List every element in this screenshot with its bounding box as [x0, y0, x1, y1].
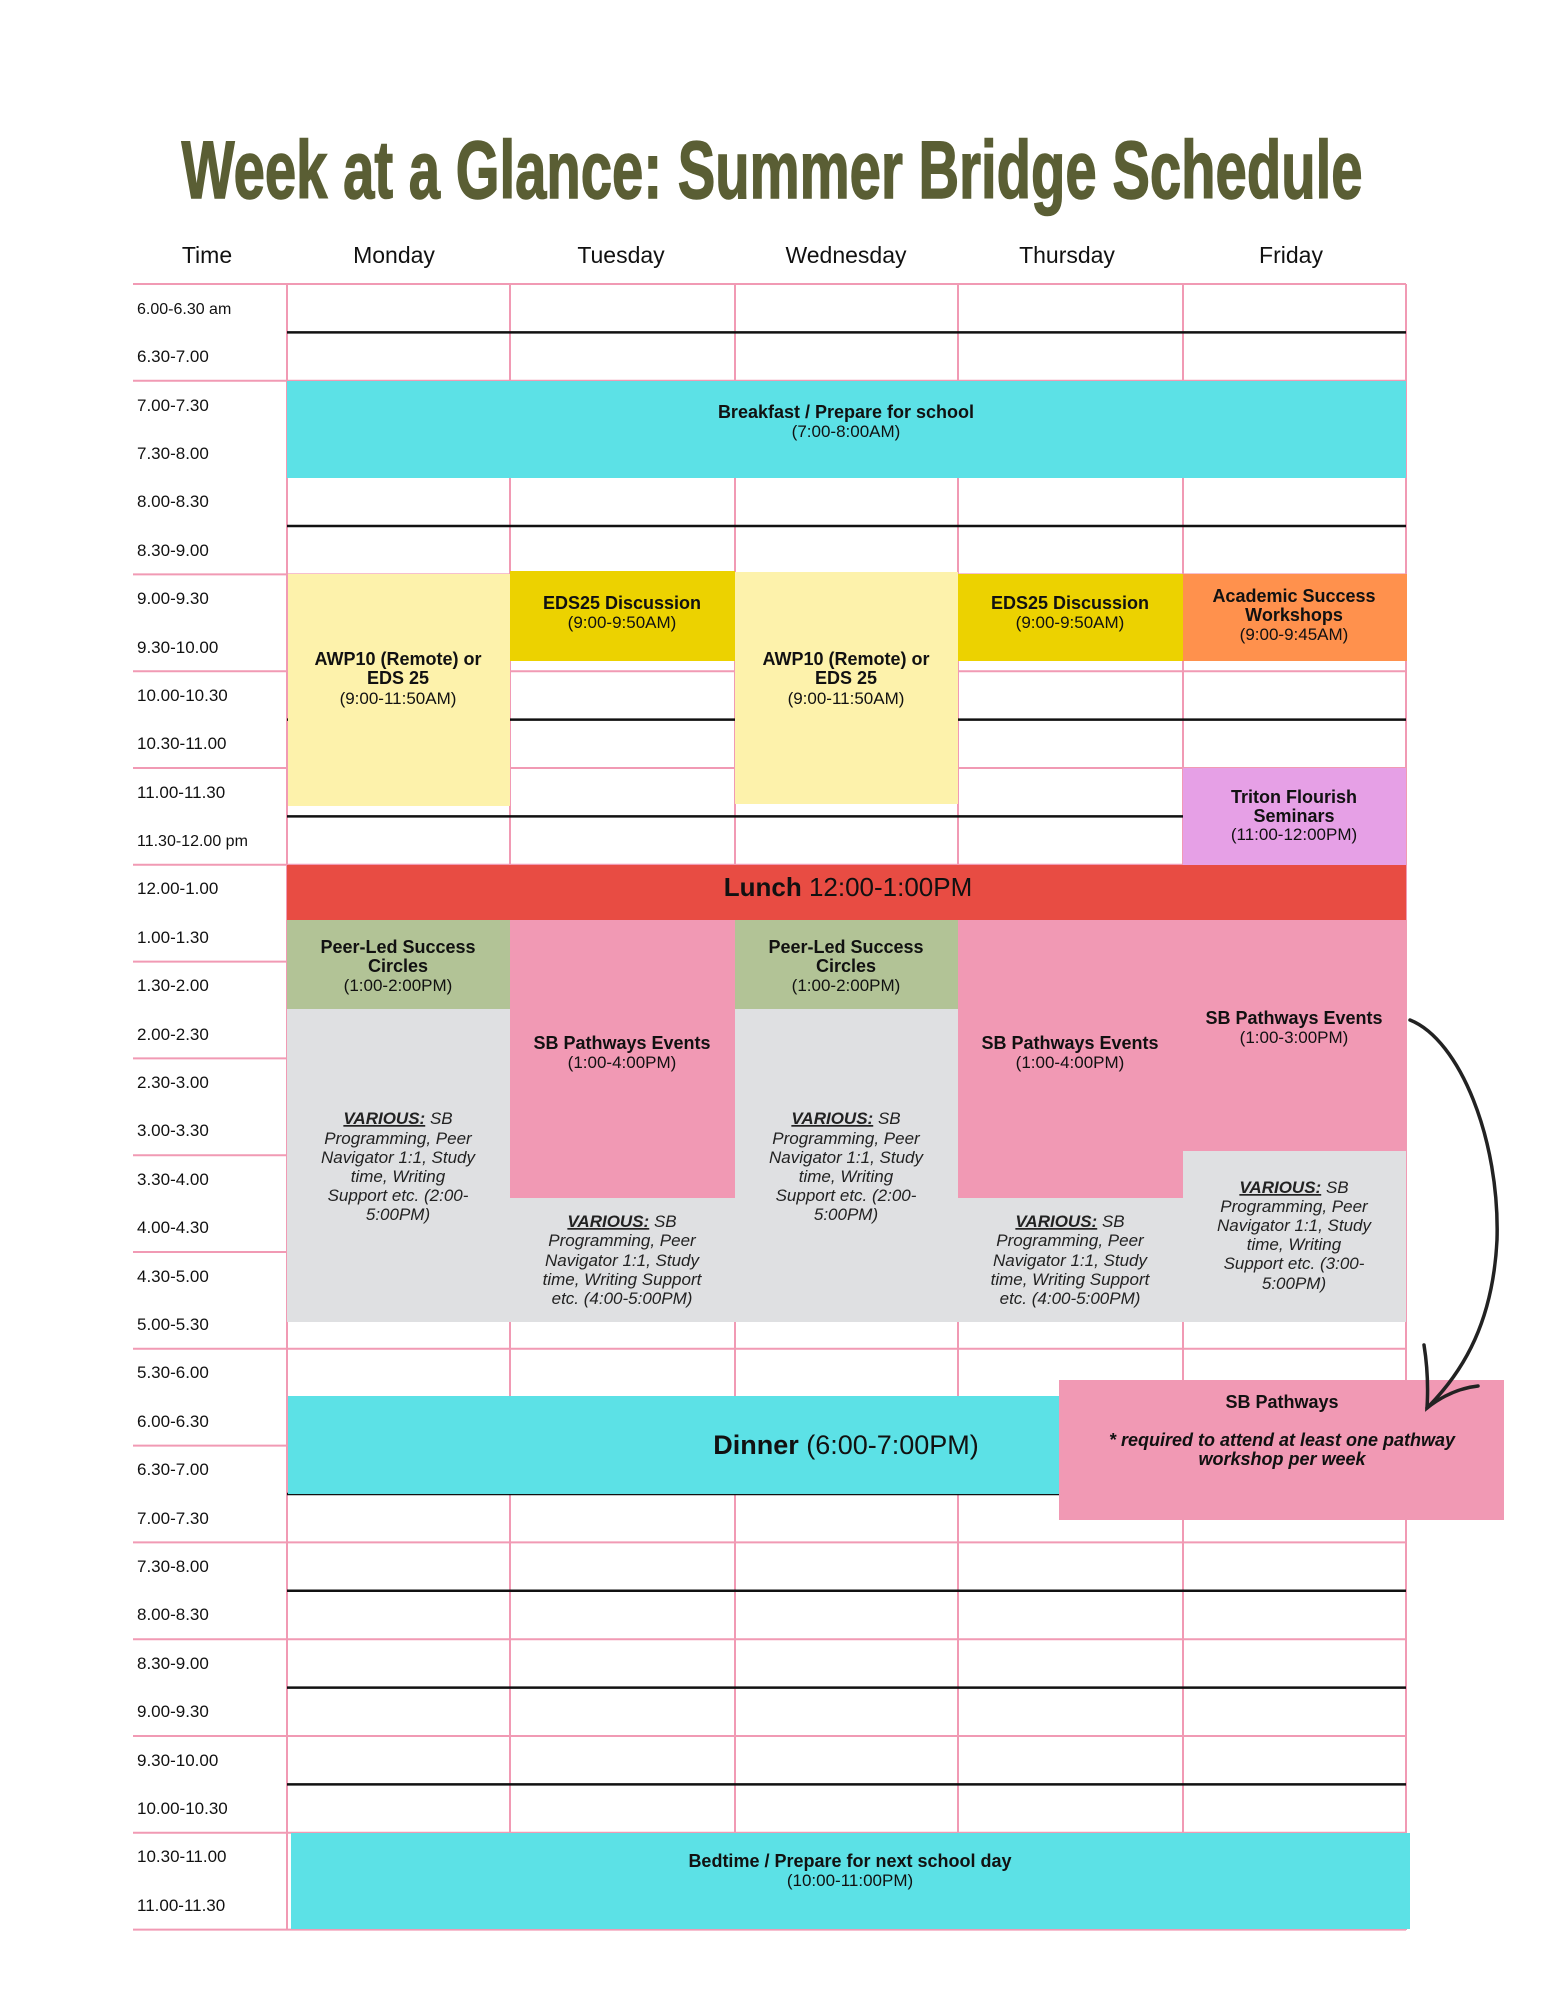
- column headers: Friday: [1259, 242, 1323, 268]
- Friday Academic Success: Workshops: [1245, 605, 1343, 625]
- time labels: 9.00-9.30: [137, 1702, 209, 1721]
- time labels: 6.30-7.00: [137, 347, 209, 366]
- Monday various: time, Writing: [351, 1167, 446, 1186]
- column headers: Wednesday: [785, 242, 907, 268]
- Tuesday EDS25: EDS25 Discussion: [543, 593, 701, 613]
- lunch: Lunch 12:00-1:00PM: [724, 872, 972, 902]
- time labels: 3.00-3.30: [137, 1121, 209, 1140]
- Monday various: VARIOUS: SB: [343, 1109, 453, 1128]
- time labels: 8.00-8.30: [137, 492, 209, 511]
- time labels: 11.00-11.30: [137, 783, 225, 802]
- time labels: 5.30-6.00: [137, 1363, 209, 1382]
- time labels: 7.30-8.00: [137, 444, 209, 463]
- time labels: 11.30-12.00 pm: [137, 833, 248, 850]
- time labels: 3.30-4.00: [137, 1170, 209, 1189]
- Thursday various: time, Writing Support: [991, 1270, 1151, 1289]
- Wednesday various: time, Writing: [799, 1167, 894, 1186]
- Friday SB Pathways: (1:00-3:00PM): [1240, 1028, 1348, 1047]
- Wednesday AWP10: EDS 25: [815, 668, 877, 688]
- Friday Academic Success: [1183, 574, 1407, 661]
- breakfast block: [287, 381, 1406, 478]
- Tuesday various: Programming, Peer: [548, 1231, 697, 1250]
- time labels: 8.30-9.00: [137, 541, 209, 560]
- Monday AWP10: AWP10 (Remote) or: [314, 649, 482, 669]
- Wednesday AWP10: AWP10 (Remote) or: [762, 649, 930, 669]
- time labels: 6.30-7.00: [137, 1460, 209, 1479]
- time labels: 5.00-5.30: [137, 1315, 209, 1334]
- Wednesday AWP10: [735, 572, 958, 804]
- Tuesday various: [510, 1198, 735, 1322]
- callout: SB Pathways note: workshop per week: [1198, 1449, 1367, 1469]
- column headers: [182, 242, 1323, 268]
- Tuesday EDS25: (9:00-9:50AM): [568, 613, 676, 632]
- time labels: 1.30-2.00: [137, 976, 209, 995]
- time labels: 12.00-1.00: [137, 879, 218, 898]
- Tuesday various: etc. (4:00-5:00PM): [552, 1289, 692, 1308]
- bedtime block: [291, 1833, 1410, 1929]
- Friday various: [1183, 1151, 1406, 1322]
- Thursday EDS25: [958, 574, 1183, 661]
- Thursday various: [958, 1198, 1183, 1322]
- Tuesday various: VARIOUS: SB: [567, 1212, 677, 1231]
- callout: SB Pathways note: SB Pathways: [1225, 1392, 1339, 1412]
- Tuesday EDS25: [510, 571, 735, 661]
- Tuesday various: time, Writing Support: [543, 1270, 703, 1289]
- time labels: 10.00-10.30: [137, 686, 228, 705]
- time labels: 9.30-10.00: [137, 1751, 218, 1770]
- bedtime block: (10:00-11:00PM): [787, 1871, 913, 1890]
- Wednesday various: Support etc. (2:00-: [776, 1186, 917, 1205]
- Monday various: Navigator 1:1, Study: [321, 1148, 477, 1167]
- Tuesday SB Pathways: (1:00-4:00PM): [568, 1053, 676, 1072]
- Wednesday various: 5:00PM): [814, 1205, 878, 1224]
- Monday Peer-led: [287, 920, 510, 1009]
- Wednesday various: [735, 1009, 958, 1322]
- time labels: 1.00-1.30: [137, 928, 209, 947]
- Thursday various: Programming, Peer: [996, 1231, 1145, 1250]
- callout: SB Pathways note: * required to attend at least one pathway: [1109, 1430, 1456, 1450]
- Friday various: Navigator 1:1, Study: [1217, 1216, 1373, 1235]
- Thursday SB Pathways: SB Pathways Events: [981, 1033, 1159, 1053]
- time labels: 2.00-2.30: [137, 1025, 209, 1044]
- Monday AWP10: (9:00-11:50AM): [340, 689, 456, 708]
- arrow: to callout: [1410, 1020, 1497, 1408]
- Friday SB Pathways: [1183, 920, 1406, 1151]
- Wednesday various: VARIOUS: SB: [791, 1109, 901, 1128]
- time labels: 10.30-11.00: [137, 734, 226, 753]
- Thursday various: VARIOUS: SB: [1015, 1212, 1125, 1231]
- dinner block: Dinner (6:00-7:00PM): [713, 1430, 979, 1460]
- Monday Peer-led: Peer-Led Success: [320, 937, 476, 957]
- Thursday EDS25: EDS25 Discussion: [991, 593, 1149, 613]
- lunch: [287, 865, 1406, 920]
- column headers: Monday: [353, 242, 435, 268]
- Wednesday Peer-led: Circles: [816, 956, 876, 976]
- Thursday SB Pathways: [958, 920, 1183, 1198]
- time labels: 11.00-11.30: [137, 1896, 225, 1915]
- Monday various: Programming, Peer: [324, 1129, 473, 1148]
- Thursday various: Navigator 1:1, Study: [993, 1251, 1149, 1270]
- Friday Triton Flourish: Triton Flourish: [1231, 787, 1357, 807]
- time labels: [137, 301, 248, 1915]
- time labels: 8.30-9.00: [137, 1654, 209, 1673]
- time labels: 9.30-10.00: [137, 638, 218, 657]
- callout: SB Pathways note: [1059, 1380, 1504, 1520]
- Friday Triton Flourish: [1183, 768, 1406, 865]
- time labels: 9.00-9.30: [137, 589, 209, 608]
- breakfast block: (7:00-8:00AM): [792, 422, 900, 441]
- time labels: 2.30-3.00: [137, 1073, 209, 1092]
- time labels: 7.00-7.30: [137, 1509, 209, 1528]
- Monday various: 5:00PM): [366, 1205, 430, 1224]
- Wednesday various: Navigator 1:1, Study: [769, 1148, 925, 1167]
- time labels: 8.00-8.30: [137, 1605, 209, 1624]
- time labels: 10.00-10.30: [137, 1799, 228, 1818]
- Thursday various: etc. (4:00-5:00PM): [1000, 1289, 1140, 1308]
- column headers: Tuesday: [577, 242, 665, 268]
- Wednesday Peer-led: (1:00-2:00PM): [792, 976, 900, 995]
- time labels: 7.30-8.00: [137, 1557, 209, 1576]
- Wednesday Peer-led: Peer-Led Success: [768, 937, 924, 957]
- time labels: 4.30-5.00: [137, 1267, 209, 1286]
- time labels: 10.30-11.00: [137, 1847, 226, 1866]
- Tuesday SB Pathways: SB Pathways Events: [533, 1033, 711, 1053]
- Tuesday SB Pathways: [510, 920, 735, 1198]
- Friday SB Pathways: SB Pathways Events: [1205, 1008, 1383, 1028]
- Friday various: Support etc. (3:00-: [1224, 1254, 1365, 1273]
- bedtime block: Bedtime / Prepare for next school day: [688, 1851, 1012, 1871]
- Friday various: VARIOUS: SB: [1239, 1178, 1349, 1197]
- Friday Triton Flourish: Seminars: [1253, 806, 1335, 826]
- Monday AWP10: [288, 574, 510, 806]
- Friday various: time, Writing: [1247, 1235, 1342, 1254]
- Monday various: Support etc. (2:00-: [328, 1186, 469, 1205]
- Monday Peer-led: (1:00-2:00PM): [344, 976, 452, 995]
- Monday various: [287, 1009, 510, 1322]
- breakfast block: Breakfast / Prepare for school: [718, 402, 974, 422]
- time labels: 6.00-6.30 am: [137, 301, 231, 318]
- Friday Triton Flourish: (11:00-12:00PM): [1231, 825, 1357, 844]
- Thursday EDS25: (9:00-9:50AM): [1016, 613, 1124, 632]
- time labels: 4.00-4.30: [137, 1218, 209, 1237]
- Monday AWP10: EDS 25: [367, 668, 429, 688]
- Tuesday various: Navigator 1:1, Study: [545, 1251, 701, 1270]
- Thursday SB Pathways: (1:00-4:00PM): [1016, 1053, 1124, 1072]
- Friday various: Programming, Peer: [1220, 1197, 1369, 1216]
- Wednesday various: Programming, Peer: [772, 1129, 921, 1148]
- dinner block: [288, 1396, 1406, 1494]
- time labels: 7.00-7.30: [137, 396, 209, 415]
- column headers: Thursday: [1019, 242, 1115, 268]
- Friday various: 5:00PM): [1262, 1274, 1326, 1293]
- Friday Academic Success: Academic Success: [1212, 586, 1376, 606]
- Friday Academic Success: (9:00-9:45AM): [1240, 625, 1348, 644]
- Monday Peer-led: Circles: [368, 956, 428, 976]
- Wednesday Peer-led: [735, 920, 958, 1009]
- column headers: Time: [182, 242, 232, 268]
- Wednesday AWP10: (9:00-11:50AM): [788, 689, 904, 708]
- time labels: 6.00-6.30: [137, 1412, 209, 1431]
